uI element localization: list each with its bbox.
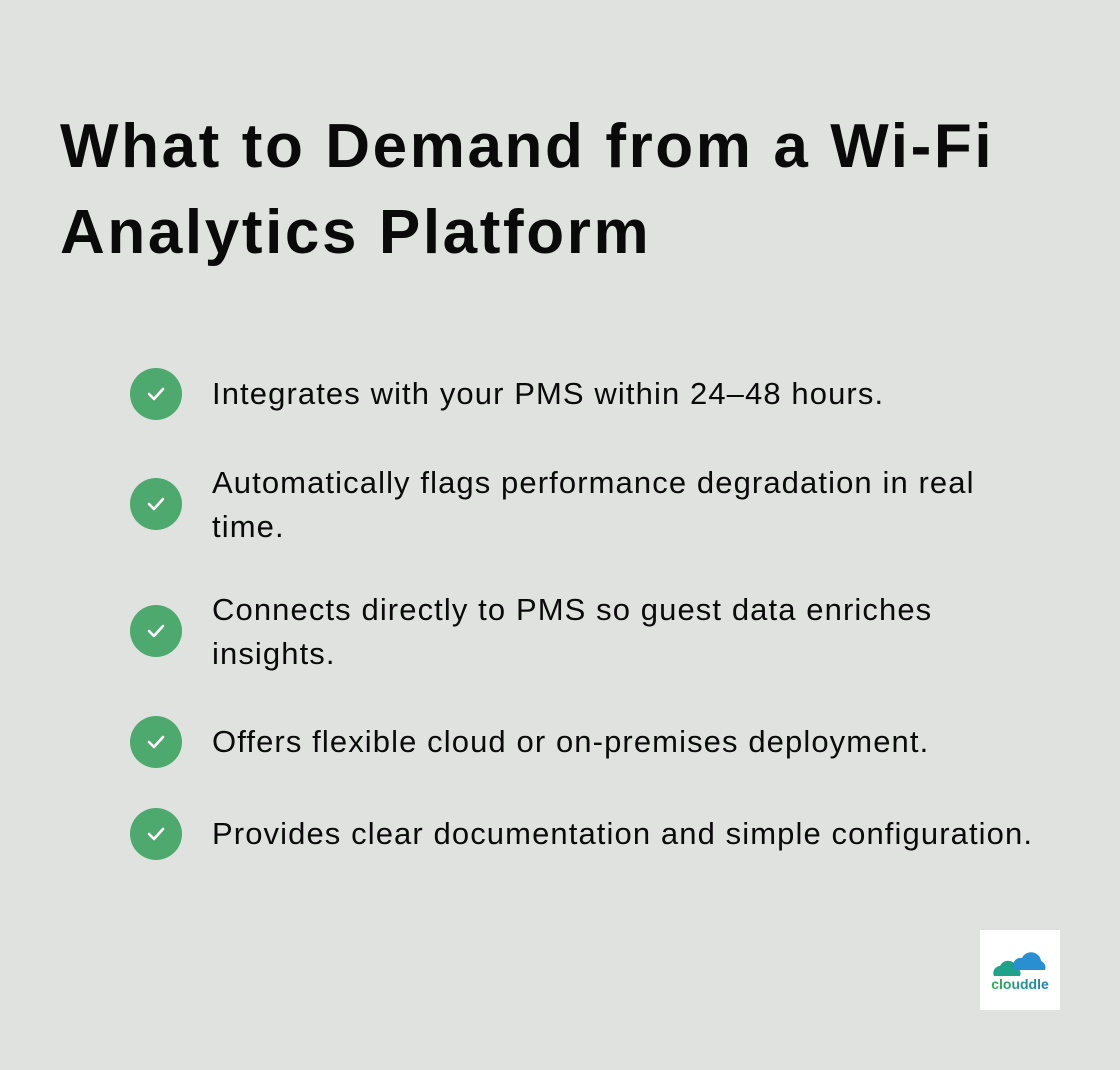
icon: check (130, 605, 182, 657)
text (212, 465, 975, 544)
item 3 (130, 592, 932, 671)
title: Analytics Platform (60, 198, 651, 267)
title: What to Demand from a Wi-Fi (60, 112, 994, 181)
item 5 (130, 808, 1033, 860)
text: Integrates with your PMS within 24–48 hours. (212, 376, 884, 411)
logo: clouddle: clouddle (991, 976, 1049, 992)
text (212, 592, 932, 671)
text: Automatically flags performance degradation in real (212, 465, 975, 500)
text: insights. (212, 636, 336, 671)
text: Provides clear documentation and simple configuration. (212, 816, 1033, 851)
icon: check (130, 808, 182, 860)
icon: check (130, 716, 182, 768)
item 1 (130, 368, 884, 420)
item 2 (130, 465, 975, 544)
logo: clouddle (980, 930, 1060, 1010)
icon: check (130, 368, 182, 420)
item 4 (130, 716, 929, 768)
text: time. (212, 509, 285, 544)
icon: check (130, 478, 182, 530)
text: Offers flexible cloud or on-premises deployment. (212, 724, 929, 759)
text: Connects directly to PMS so guest data enriches (212, 592, 932, 627)
title (60, 112, 994, 267)
